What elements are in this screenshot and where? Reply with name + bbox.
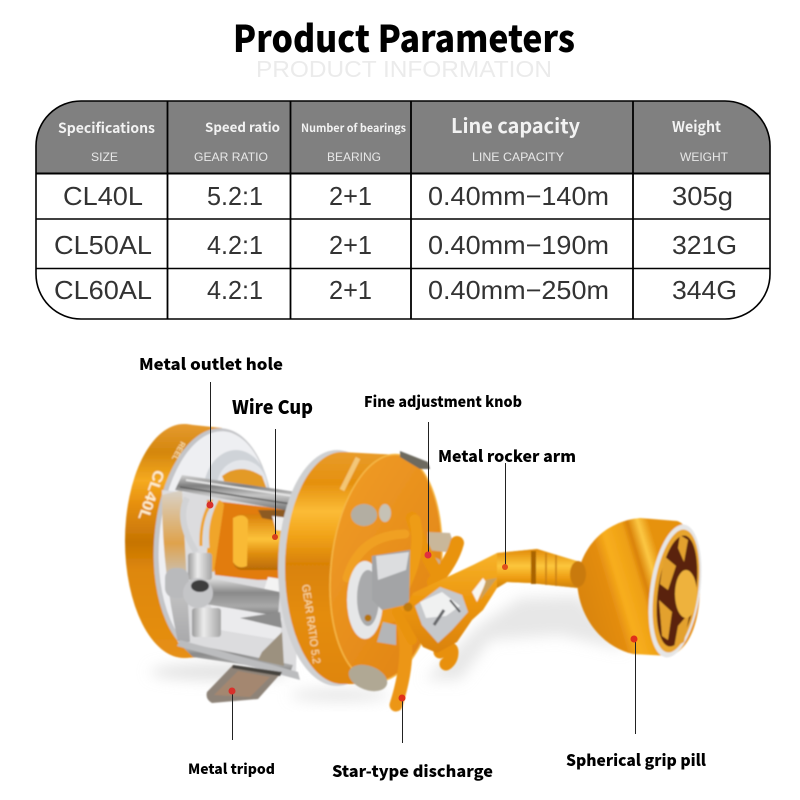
right side plate: GEAR RATIO 5.2	[299, 584, 322, 665]
row: CL60AL: CL60AL	[54, 275, 152, 305]
table header band	[36, 101, 770, 173]
leader: fine adjustment knob	[424, 422, 432, 558]
reel body	[125, 424, 709, 705]
row: CL60AL: 344G	[672, 275, 737, 305]
header: weight: WEIGHT	[680, 150, 729, 164]
drag nut	[415, 587, 468, 643]
label: wire cup: Wire Cup	[232, 393, 313, 420]
header: number of bearings	[301, 120, 407, 164]
row: CL60AL: 4.2:1	[207, 275, 263, 305]
row: CL60AL	[54, 275, 737, 305]
header: speed ratio: Speed ratio	[205, 117, 280, 136]
header: weight	[672, 116, 729, 164]
leader: wire cup	[272, 429, 278, 540]
title: Product Parameters	[233, 9, 575, 63]
table grid	[36, 101, 770, 319]
specification table	[36, 101, 770, 319]
leader: spherical grip pill	[630, 636, 638, 734]
header: number of bearings: Number of bearings	[301, 120, 407, 136]
header: line capacity	[451, 110, 581, 164]
reel shadow	[150, 596, 625, 701]
metal tripod foot	[207, 665, 282, 703]
leader: metal rocker arm	[502, 463, 508, 570]
label: metal outlet hole: Metal outlet hole	[139, 351, 283, 375]
cage rods	[175, 475, 303, 680]
row: CL40L: 2+1	[329, 181, 372, 211]
star drag	[347, 518, 457, 705]
header: specifications: Specifications	[58, 118, 155, 138]
leader: metal outlet hole	[206, 382, 214, 508]
header: specifications	[58, 118, 155, 164]
row: CL50AL: 4.2:1	[207, 230, 263, 260]
row: CL40L: 5.2:1	[207, 181, 263, 211]
label: metal tripod: Metal tripod	[188, 759, 275, 779]
row: CL50AL: 0.40mm−190m	[428, 230, 609, 260]
subtitle: faded product information: PRODUCT INFORMATION	[256, 56, 552, 82]
crank stub	[440, 648, 452, 664]
spherical grip knob	[570, 518, 709, 661]
left side plate	[125, 424, 282, 662]
label: metal rocker arm: Metal rocker arm	[438, 443, 576, 467]
header: weight: Weight	[672, 116, 722, 137]
row: CL50AL	[54, 230, 737, 260]
row: CL50AL: 321G	[672, 230, 737, 260]
spindle hub	[347, 550, 410, 645]
leader: star-type discharge	[398, 694, 406, 743]
header: line capacity: LINE CAPACITY	[472, 150, 564, 164]
row: CL40L: CL40L	[63, 181, 143, 211]
fine adjustment knob	[427, 532, 453, 578]
line guide	[165, 498, 221, 637]
row: CL40L	[63, 181, 733, 211]
header: speed ratio	[194, 117, 280, 164]
row: CL50AL: 2+1	[329, 230, 372, 260]
interior and spool	[162, 490, 300, 672]
label: star-type discharge: Star-type discharge	[332, 758, 493, 782]
row: CL40L: 305g	[672, 181, 733, 211]
row: CL50AL: CL50AL	[54, 230, 152, 260]
label: spherical grip pill: Spherical grip pill	[566, 747, 707, 771]
leader: metal tripod	[228, 688, 236, 740]
fishing reel illustration	[125, 382, 709, 743]
header: specifications: SIZE	[91, 150, 118, 164]
header: line capacity: Line capacity	[451, 110, 581, 139]
row: CL60AL: 2+1	[329, 275, 372, 305]
header: speed ratio: GEAR RATIO	[194, 150, 268, 164]
row: CL60AL: 0.40mm−250m	[428, 275, 609, 305]
left side plate: REEL	[170, 440, 187, 462]
metal rocker arm	[402, 549, 580, 653]
label: fine adjustment knob: Fine adjustment knob	[364, 391, 522, 412]
header: number of bearings: BEARING	[327, 150, 381, 164]
face bolts	[345, 504, 391, 696]
row: CL40L: 0.40mm−140m	[428, 181, 609, 211]
right side plate	[278, 449, 453, 696]
left side plate: CL40L	[134, 468, 167, 522]
